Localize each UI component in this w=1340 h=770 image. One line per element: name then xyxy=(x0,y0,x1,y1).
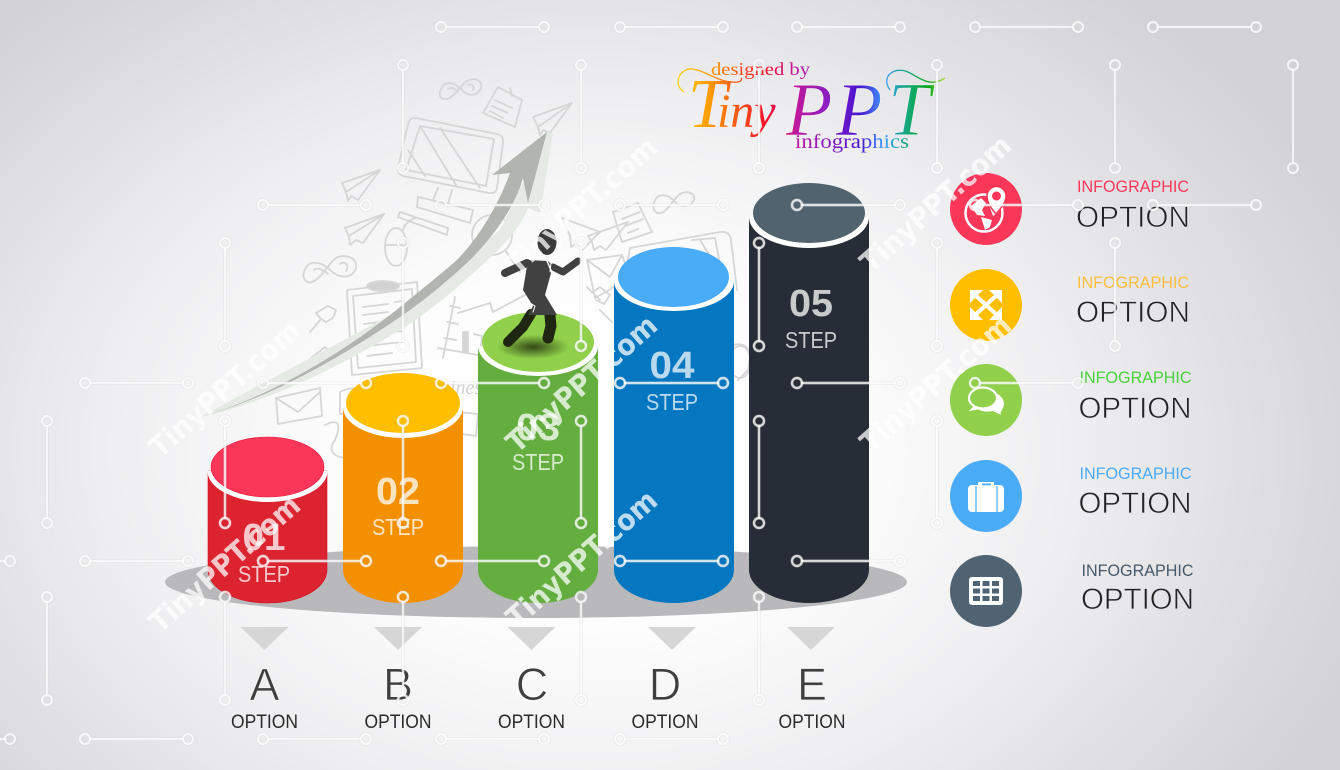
column label E: OPTION xyxy=(778,712,846,733)
step label 04: STEP xyxy=(646,389,698,415)
cylinder 05 dark xyxy=(749,183,869,603)
column label D: D xyxy=(649,659,681,710)
step label 05: 05 xyxy=(789,283,833,325)
watermark overlay: TinyPPT.com text: TinyPPT.com xyxy=(499,308,664,459)
step label 03 xyxy=(512,407,564,475)
watermark overlay: TinyPPT.com text xyxy=(142,128,1018,639)
running businessman figure xyxy=(505,229,578,342)
column label C: C xyxy=(516,659,548,710)
cylinder 04 blue xyxy=(614,247,734,603)
watermark overlay: TinyPPT.com text: TinyPPT.com xyxy=(853,308,1018,459)
column label D: OPTION xyxy=(632,712,698,733)
step label 05 xyxy=(785,283,837,353)
option row 2: OPTION xyxy=(1076,296,1190,329)
ground shadow xyxy=(165,546,907,618)
step label 02 xyxy=(372,471,424,540)
icon: briefcase xyxy=(968,482,1004,512)
logo: designed by TinyPPT infographics xyxy=(678,59,945,153)
option row 2: INFOGRAPHIC xyxy=(1077,273,1189,292)
watermark overlay: TinyPPT.com text: TinyPPT.com xyxy=(853,128,1018,279)
icon: globe with map pin xyxy=(966,186,1006,232)
option row 4 xyxy=(950,460,1192,532)
column label B xyxy=(364,627,432,733)
option row 2 xyxy=(950,269,1190,341)
option row 1: INFOGRAPHIC xyxy=(1077,177,1189,196)
column label B: OPTION xyxy=(364,712,432,733)
icon: table grid xyxy=(969,577,1003,605)
cylinder 03 green xyxy=(478,312,598,603)
cylinder 01 red xyxy=(208,437,328,603)
step label 01: 01 xyxy=(242,517,286,559)
logo: designed by TinyPPT infographics: Tiny xyxy=(688,66,776,143)
option row 4: OPTION xyxy=(1078,487,1192,520)
option row 3 xyxy=(950,364,1192,436)
step label 04: 04 xyxy=(650,345,694,387)
watermark overlay: TinyPPT.com text: TinyPPT.com xyxy=(142,488,307,639)
step label 01: STEP xyxy=(238,561,290,587)
watermark overlay: TinyPPT.com text: TinyPPT.com xyxy=(142,313,307,464)
background doodles: Business xyxy=(420,377,490,399)
cylinder 02 orange xyxy=(343,373,463,603)
step label 01 xyxy=(238,517,290,587)
option row 5: INFOGRAPHIC xyxy=(1082,561,1194,580)
step label 05: STEP xyxy=(785,327,837,353)
logo: designed by TinyPPT infographics: designed by xyxy=(711,59,810,79)
option row 1 xyxy=(950,173,1190,245)
column label C xyxy=(498,627,565,733)
step label 04 xyxy=(646,345,698,415)
option row 3: INFOGRAPHIC xyxy=(1080,368,1192,387)
step label 02: STEP xyxy=(372,514,424,540)
logo: designed by TinyPPT infographics: infographics xyxy=(795,131,909,153)
column label A xyxy=(231,627,298,733)
column label A: OPTION xyxy=(231,712,298,733)
column label E xyxy=(778,627,846,733)
option row 4: INFOGRAPHIC xyxy=(1080,464,1192,483)
watermark overlay: TinyPPT.com text: TinyPPT.com xyxy=(499,130,664,281)
option row 1: OPTION xyxy=(1076,201,1190,234)
step label 03: STEP xyxy=(512,449,564,475)
column label C: OPTION xyxy=(498,712,565,733)
option row 3: OPTION xyxy=(1078,392,1192,425)
step label 03: 03 xyxy=(516,407,560,449)
icon: speech bubbles xyxy=(969,388,1004,415)
watermark overlay: TinyPPT.com text: TinyPPT.com xyxy=(499,483,664,634)
growth arrow xyxy=(200,132,553,417)
option row 5 xyxy=(950,555,1194,627)
column label B: B xyxy=(383,659,413,710)
logo: designed by TinyPPT infographics: PPT xyxy=(785,68,935,152)
icon: expand arrows xyxy=(970,290,1002,320)
column label D xyxy=(632,627,698,733)
step label 02: 02 xyxy=(376,471,420,513)
column label A: A xyxy=(249,659,280,710)
option row 5: OPTION xyxy=(1081,583,1194,616)
background doodles xyxy=(276,79,751,458)
column label E: E xyxy=(797,659,827,710)
